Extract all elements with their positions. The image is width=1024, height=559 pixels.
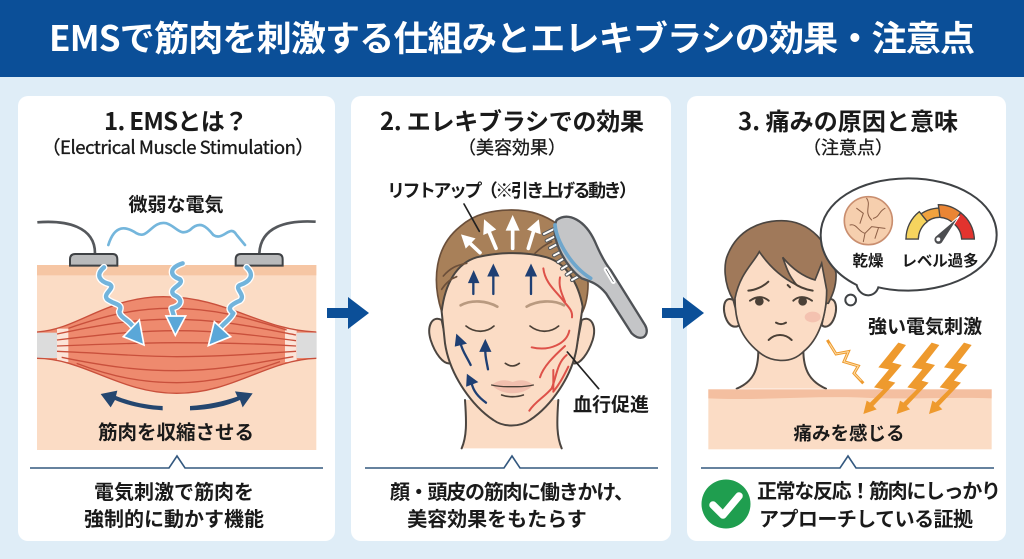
icon: dry skin — [844, 197, 892, 245]
arrow: panel 2 to 3 — [662, 297, 704, 329]
neck — [737, 350, 826, 389]
illustration: muscle stimulation — [37, 221, 317, 450]
facial features — [748, 282, 813, 340]
title: EMSで筋肉を刺激する仕組みとエレキブラシの効果・注意点 — [49, 11, 975, 62]
ears — [429, 319, 451, 363]
arrow: panel 1 to 2 — [327, 297, 369, 329]
leader lines — [464, 204, 479, 231]
muscle — [37, 297, 317, 393]
panel: 2. brush — [351, 96, 671, 541]
blush — [805, 312, 821, 322]
face — [442, 253, 583, 425]
summary: panel 3: アプローチしている証拠 — [759, 503, 973, 532]
label: feel pain: 痛みを感じる — [793, 420, 905, 446]
skin layer — [37, 265, 316, 450]
electrodes and wires — [37, 221, 316, 266]
summary: panel 1: 強制的に動かす機能 — [84, 503, 264, 532]
hair strands — [442, 242, 552, 289]
header banner — [0, 0, 1024, 77]
label: weak electricity: 微弱な電気 — [128, 190, 224, 217]
subheading: panel 1: （Electrical Muscle Stimulation） — [42, 134, 314, 160]
blood vessels — [529, 268, 572, 411]
illustration: face with brush — [429, 204, 647, 448]
hair back — [725, 221, 836, 303]
facial features — [466, 326, 559, 397]
lips — [492, 380, 533, 393]
summary: panel 2 — [390, 476, 634, 532]
panel: 3. pain — [687, 96, 1006, 541]
strong lightning — [863, 343, 972, 414]
label: dryness: 乾燥 — [852, 249, 884, 271]
icon: level gauge — [906, 205, 974, 244]
blue lift arrows — [455, 265, 536, 403]
current arrows — [99, 263, 251, 346]
divider — [701, 456, 994, 468]
heading: panel 2: 2. エレキブラシでの効果 — [380, 102, 644, 137]
summary: panel 2: 顔・頭皮の筋肉に働きかけ、 — [390, 476, 634, 505]
subheading: panel 3: （注意点） — [803, 134, 893, 160]
label: circulation: 血行促進 — [573, 390, 649, 417]
label: level too high: レベル過多 — [902, 249, 978, 271]
thought bubble — [821, 178, 997, 305]
contraction arrows — [101, 391, 253, 410]
divider — [30, 456, 323, 468]
icon: lightning bolts — [827, 340, 972, 414]
icon: electric brush — [544, 217, 647, 338]
summary: panel 3 — [757, 475, 1001, 532]
summary: panel 3: 正常な反応！筋肉にしっかり — [757, 475, 1001, 504]
neck — [462, 400, 562, 448]
label: lift up: リフトアップ（※引き上げる動き） — [387, 177, 637, 203]
icon: green check — [702, 480, 750, 528]
electric wave — [108, 223, 245, 245]
skin layer — [708, 389, 992, 449]
summary: panel 1: 電気刺激で筋肉を — [94, 476, 254, 505]
panel: 1. EMS — [18, 96, 335, 541]
illustration: worried person — [708, 178, 997, 449]
divider — [365, 456, 658, 468]
face — [735, 252, 827, 360]
label: strong stimulation: 強い電気刺激 — [868, 312, 982, 339]
summary: panel 1 — [84, 476, 264, 532]
eyebrows — [461, 301, 564, 307]
heading: panel 1: 1. EMSとは？ — [104, 102, 248, 137]
ears — [724, 299, 740, 327]
hair — [436, 210, 588, 312]
subheading: panel 2: （美容効果） — [458, 134, 566, 160]
heading: panel 3: 3. 痛みの原因と意味 — [738, 102, 958, 137]
label: contract muscle: 筋肉を収縮させる — [98, 416, 254, 445]
summary: panel 2: 美容効果をもたらす — [407, 503, 587, 532]
small lightning — [827, 340, 863, 383]
white lift arrows — [462, 217, 540, 253]
